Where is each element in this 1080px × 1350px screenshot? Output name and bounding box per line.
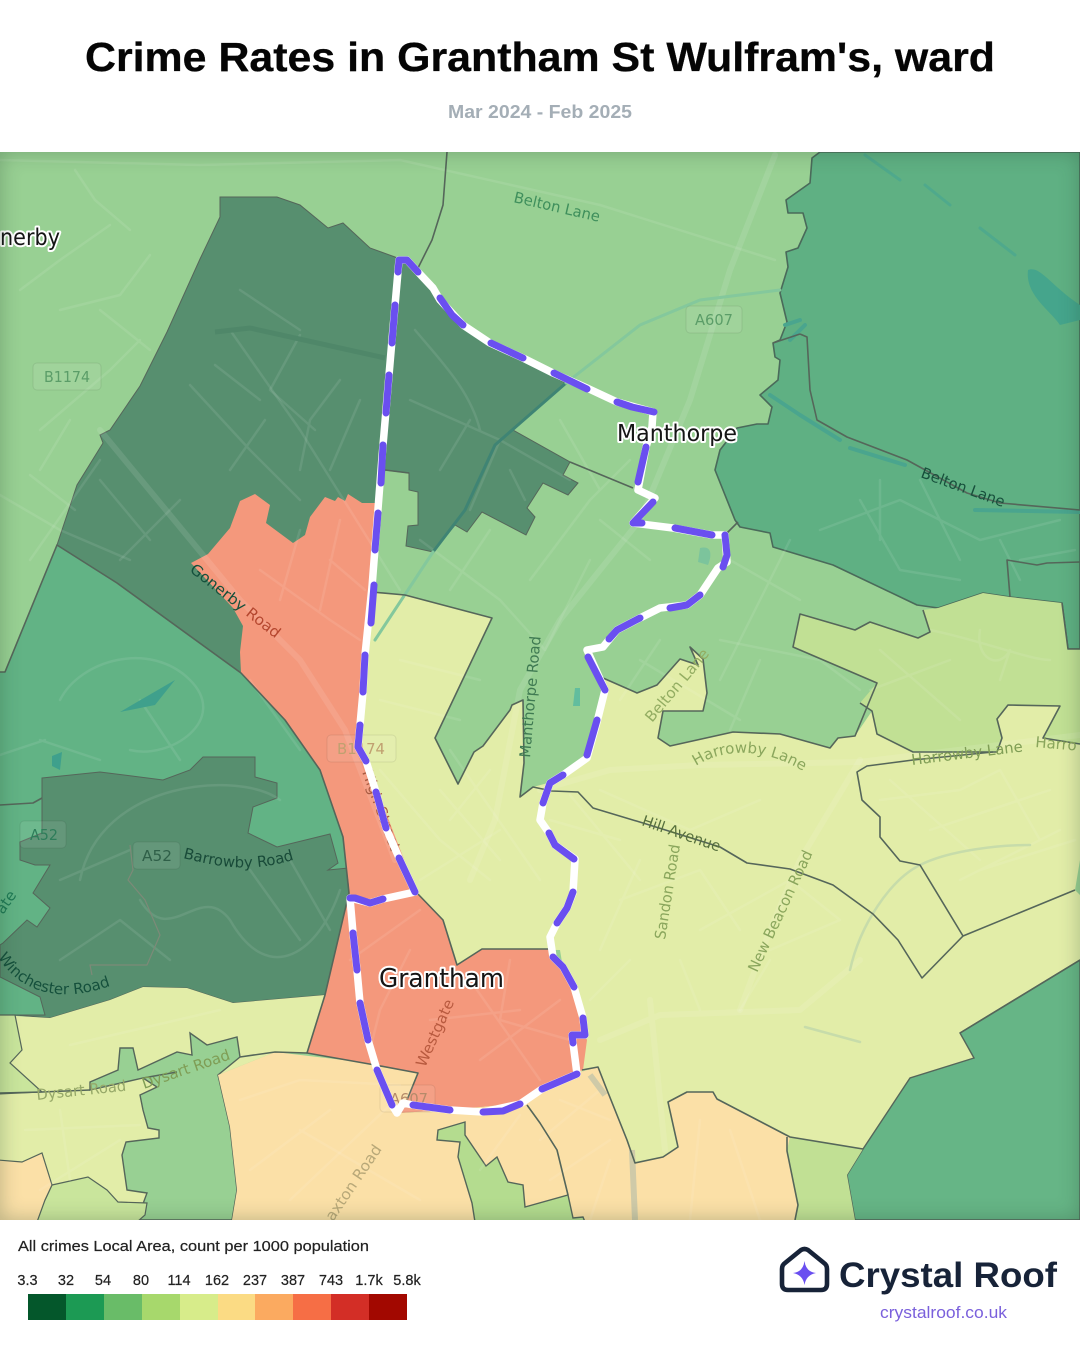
place labels: Grantham: [379, 964, 504, 994]
legend tick labels: 54: [95, 1273, 111, 1289]
road badges: A52: [30, 826, 58, 844]
logo wordmark: Crystal Roof: [839, 1256, 1057, 1295]
road badges: B1174: [337, 740, 385, 758]
area: central and eastern pale: [340, 592, 1080, 1163]
road labels: [0, 192, 1076, 1220]
legend tick labels: 387: [281, 1273, 305, 1289]
area: western green patch: [90, 1033, 240, 1220]
place labels: Manthorpe: [617, 421, 737, 447]
road labels: Gonerby Road: [187, 560, 284, 642]
map edge vignette: [0, 152, 1080, 1220]
road labels: Belton Lane: [512, 188, 602, 226]
road labels: axton Road: [321, 1141, 386, 1224]
area: salmon north: [191, 494, 417, 900]
road labels: Westgate: [412, 997, 458, 1070]
area: south cream: [218, 1052, 798, 1220]
area: bottom-left lime: [38, 1176, 148, 1220]
area: far-west lime: [0, 1015, 42, 1094]
legend tick labels: 5.8k: [393, 1273, 421, 1289]
legend tick labels: 1.7k: [355, 1273, 383, 1289]
dark road strip: [215, 328, 385, 358]
ward boundary purple dashes: [350, 260, 727, 1112]
legend tick labels: 3.3: [17, 1273, 38, 1289]
road labels: Hill Avenue: [640, 812, 723, 855]
area: north-east lime: [793, 593, 1080, 752]
place labels: nerby: [0, 225, 60, 251]
road labels: Belton Lane: [641, 645, 713, 726]
area: eastern teal: [715, 152, 1080, 649]
area: south-west pale: [0, 987, 325, 1220]
legend tick labels: 162: [205, 1273, 229, 1289]
area: western teal: [0, 545, 349, 1053]
legend title: All crimes Local Area, count per 1000 population: [18, 1239, 369, 1255]
title: Crime Rates in Grantham St Wulfram's, ward: [85, 34, 995, 80]
area: salmon south: [307, 893, 587, 1113]
legend tick labels: [17, 1273, 421, 1289]
road labels: Harro: [1035, 733, 1077, 755]
road labels: Dysart Road: [139, 1046, 232, 1093]
legend tick labels: 32: [58, 1273, 74, 1289]
area: north-west low crime: [57, 197, 578, 700]
legend colour bar: [28, 1294, 407, 1320]
subtitle: Mar 2024 - Feb 2025: [448, 102, 632, 122]
road badges: A52: [142, 847, 172, 865]
area: south-east teal: [847, 960, 1080, 1220]
road labels: High Street: [358, 767, 404, 853]
road labels: Harrowby Lane: [910, 737, 1024, 769]
road badges: A607: [390, 1090, 428, 1108]
legend tick labels: 237: [243, 1273, 267, 1289]
road badges: [20, 306, 742, 1112]
ward boundary white line: [350, 260, 727, 1113]
boundaries: [0, 152, 1080, 1220]
legend tick labels: 743: [319, 1273, 343, 1289]
place labels: [0, 225, 737, 994]
logo url: crystalroof.co.uk: [880, 1304, 1008, 1322]
area: bottom lime: [787, 1137, 863, 1220]
road labels: Harrowby Lane: [692, 742, 806, 770]
legend tick labels: 80: [133, 1273, 149, 1289]
water features: [52, 155, 1080, 1220]
road badges: A607: [695, 311, 733, 329]
road labels: Sandon Road: [651, 843, 684, 941]
logo icon: house with star: [782, 1249, 827, 1290]
road labels: Dysart Road: [36, 1077, 127, 1104]
area: south-west low crime: [0, 757, 349, 1018]
legend tick labels: 114: [167, 1273, 191, 1289]
area: south green patch: [437, 1122, 585, 1222]
choropleth map: [0, 152, 1080, 1220]
road network: [0, 155, 1080, 1220]
road badges: B1174: [44, 368, 90, 386]
road labels: Manthorpe Road: [516, 635, 545, 758]
road labels: New Beacon Road: [744, 847, 816, 975]
area: bottom-left cream: [0, 1153, 52, 1222]
road labels: Belton Lane: [919, 464, 1007, 511]
road labels: Barrowby Road: [184, 848, 293, 871]
